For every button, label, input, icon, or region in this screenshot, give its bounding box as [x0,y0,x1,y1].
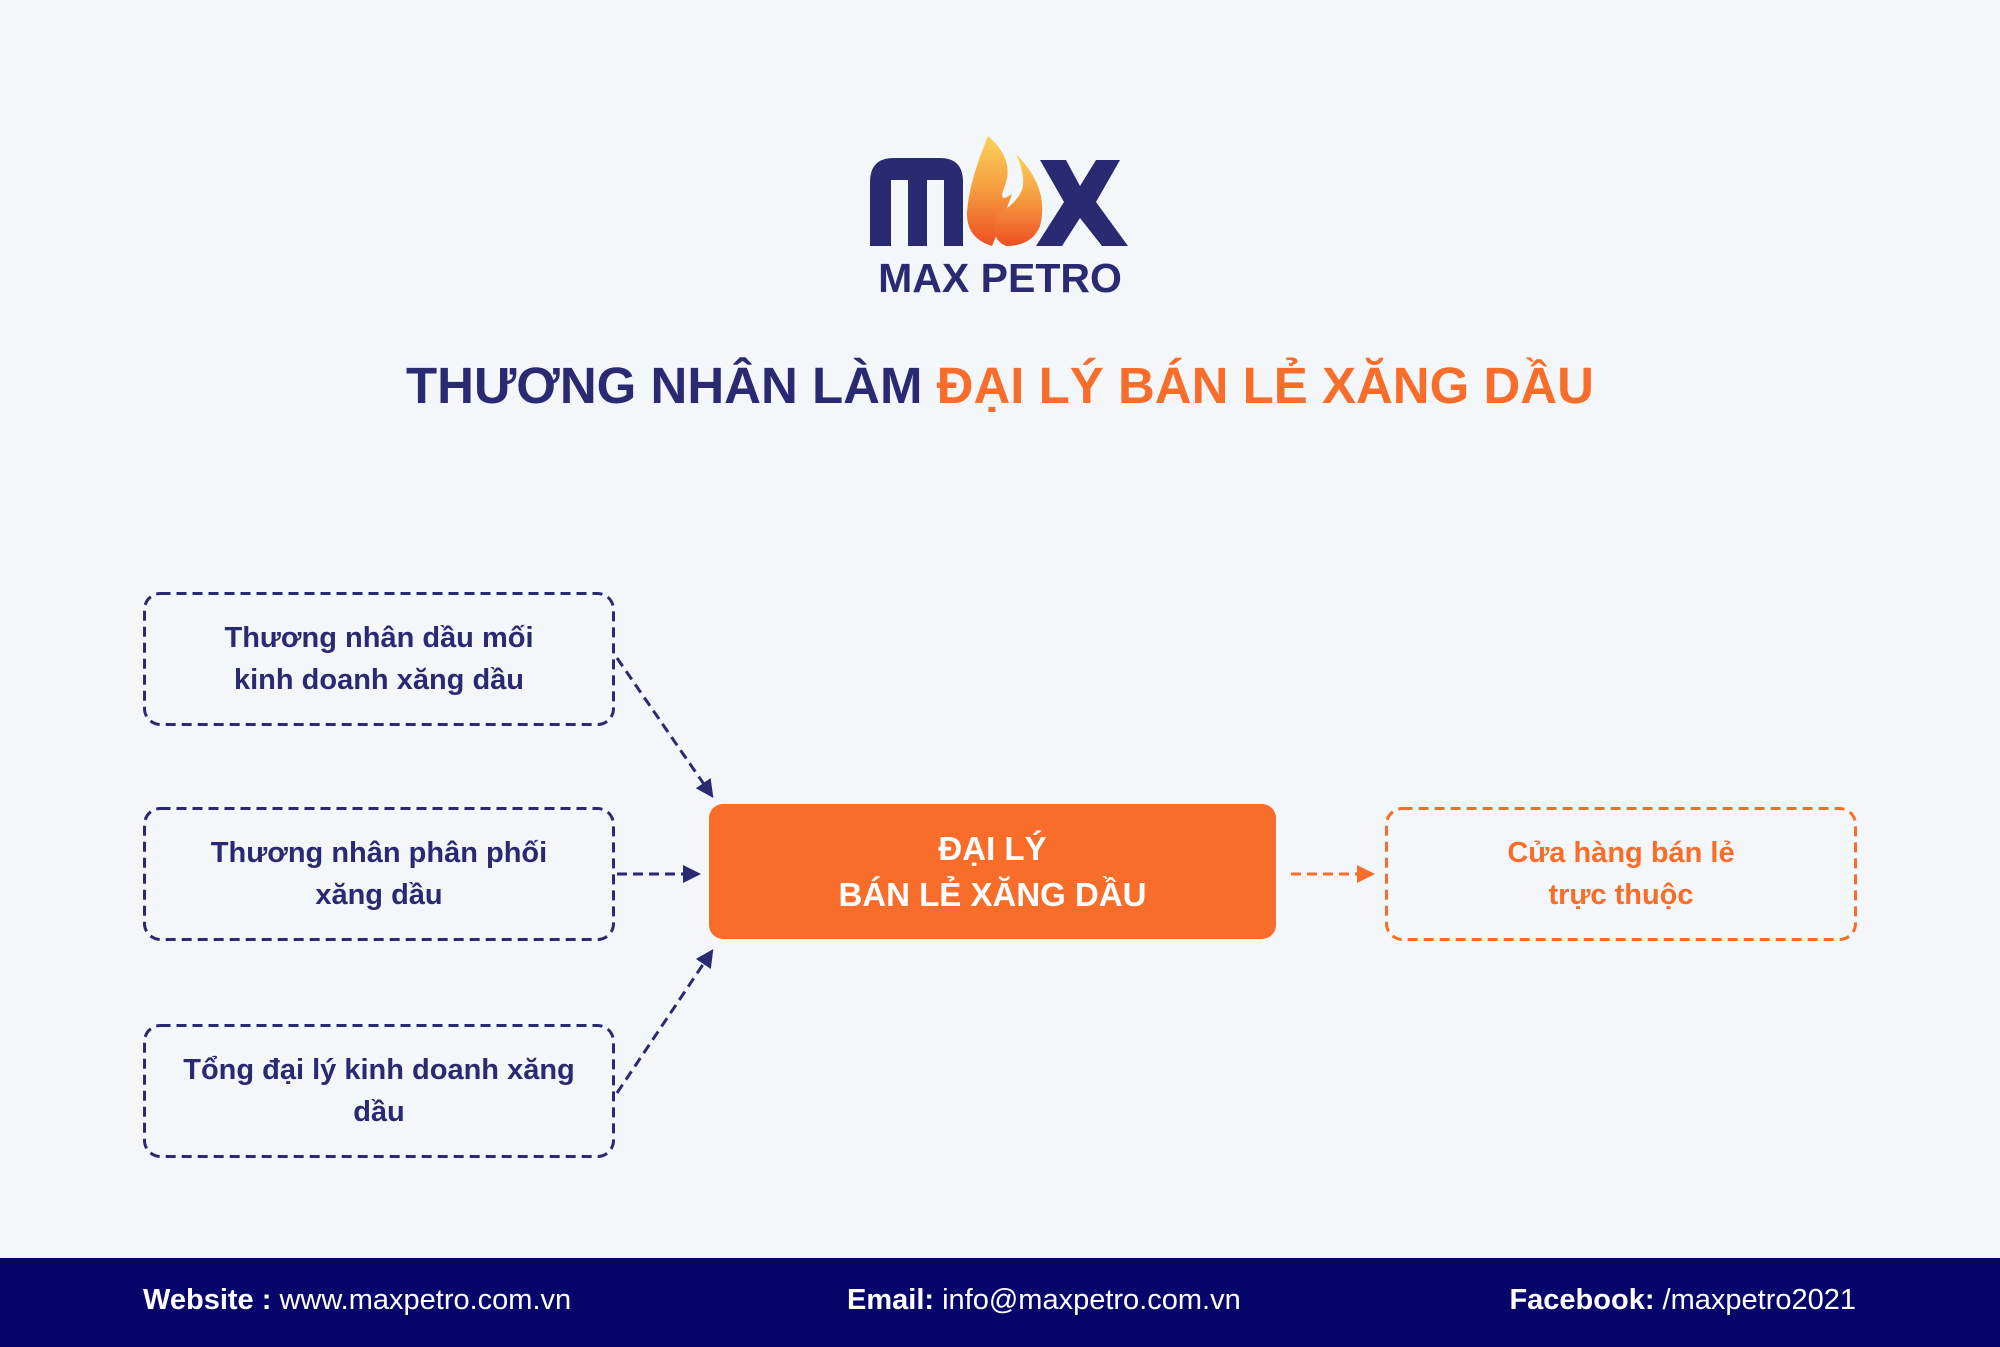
arrow 2 [617,872,695,876]
box: tong dai ly: dầu [353,1096,405,1128]
box: thuong nhan phan phoi: xăng dầu [315,879,443,911]
logo [870,136,1128,300]
logo text: MAX PETRO [878,255,1122,300]
arrow 3 [617,954,710,1093]
center box: dai ly ban le: BÁN LẺ XĂNG DẦU [838,876,1146,912]
center box: dai ly ban le [709,804,1276,939]
box: thuong nhan phan phoi [143,807,615,941]
arrow 4 [1291,872,1369,876]
box: cua hang [1385,807,1857,941]
box: cua hang: Cửa hàng bán lẻ [1507,837,1735,869]
box: tong dai ly [143,1024,615,1158]
box: thuong nhan dau moi [143,592,615,726]
icon: m letter [870,158,963,246]
box: thuong nhan dau moi: Thương nhân dầu mối [224,622,534,654]
box: tong dai ly: Tổng đại lý kinh doanh xăng [183,1054,575,1086]
box: thuong nhan dau moi: kinh doanh xăng dầu [234,664,524,696]
box: cua hang: trực thuộc [1548,879,1694,911]
icon: flame [967,136,1042,246]
box: thuong nhan phan phoi: Thương nhân phân phối [211,837,547,869]
arrow 1 [617,658,710,793]
footer: website: Website : www.maxpetro.com.vn [143,1284,571,1316]
icon: x letter [1036,160,1128,246]
title: THƯƠNG NHÂN LÀM ĐẠI LÝ BÁN LẺ XĂNG DẦU [406,357,1594,414]
footer [0,1258,2000,1347]
footer: facebook: Facebook: /maxpetro2021 [1509,1284,1856,1316]
footer: email: Email: info@maxpetro.com.vn [847,1284,1241,1316]
center box: dai ly ban le: ĐẠI LÝ [938,830,1047,866]
